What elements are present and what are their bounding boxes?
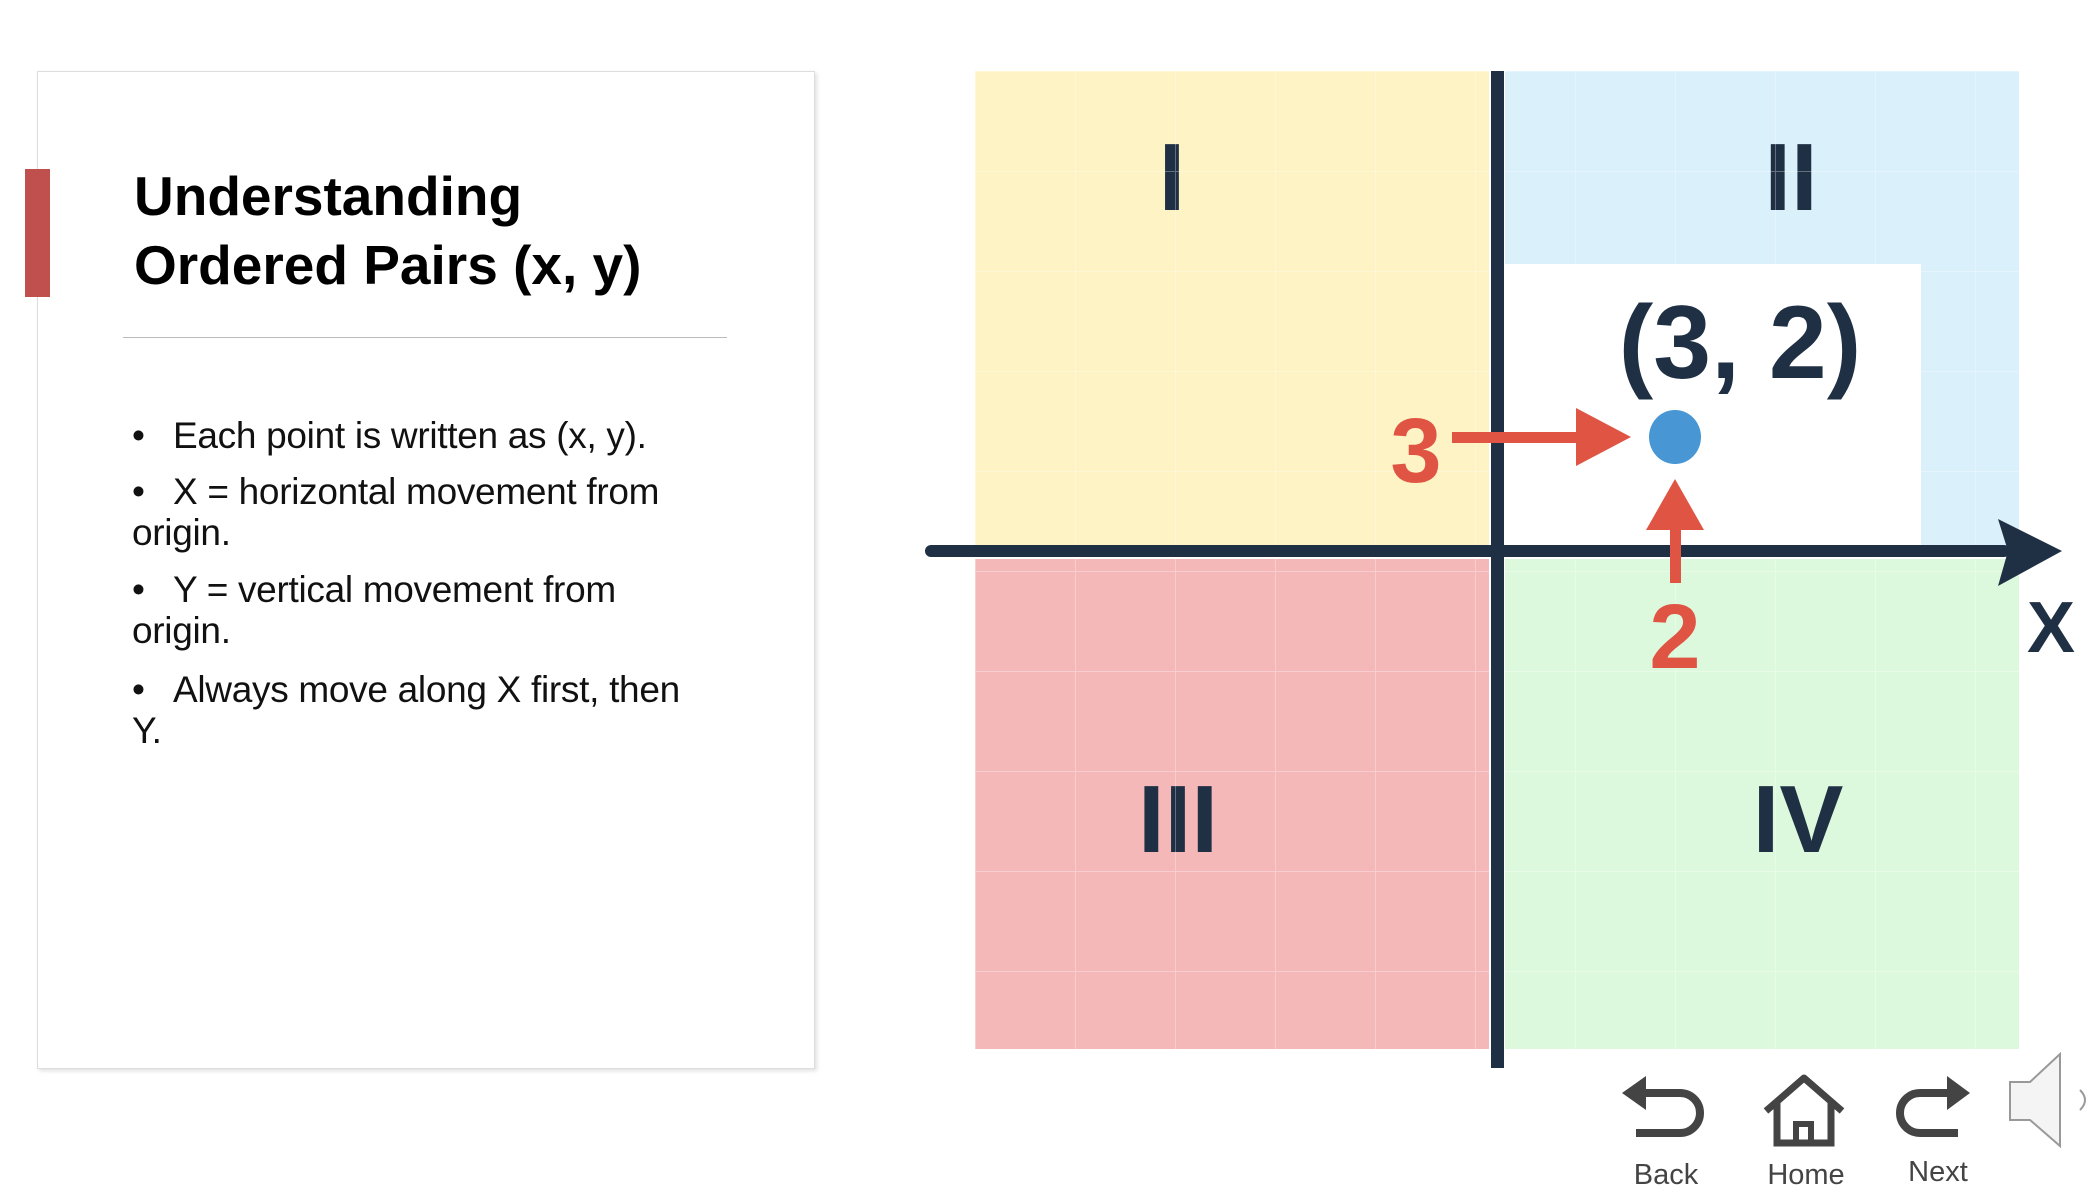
- arrow: y = 2: [1646, 479, 1704, 688]
- bullet list: origin.: [132, 610, 231, 651]
- nav: home: Home: [1767, 1159, 1845, 1191]
- bullet list: X = horizontal movement from: [173, 471, 659, 512]
- icon: speaker: [2010, 1054, 2085, 1146]
- nav: home: [1766, 1078, 1845, 1191]
- bullet list: origin.: [132, 512, 231, 553]
- bullet list: [132, 415, 680, 751]
- point: [1649, 410, 1701, 464]
- bullet list: •: [132, 669, 145, 710]
- title: Ordered Pairs (x, y): [134, 234, 641, 296]
- label: (3, 2): (3, 2): [1619, 285, 1861, 401]
- nav: back: Back: [1634, 1159, 1699, 1191]
- red accent bar: [25, 169, 50, 297]
- arrow: x = 3: 3: [1390, 400, 1442, 502]
- quadrant III: [975, 559, 1489, 1049]
- quadrant III: III: [1138, 766, 1218, 873]
- nav: next: Next: [1908, 1156, 1968, 1188]
- axes: X: [2027, 588, 2075, 668]
- bullet list: •: [132, 471, 145, 512]
- bullet list: Each point is written as (x, y).: [173, 415, 647, 456]
- bullet list: Always move along X first, then: [173, 669, 680, 710]
- arrow: y = 2: 2: [1649, 586, 1701, 688]
- title: Understanding: [134, 165, 522, 227]
- quadrant I: [975, 71, 1489, 546]
- axes: [925, 71, 2075, 1068]
- panel: text card: [37, 71, 815, 1069]
- quadrant II: [1505, 71, 2019, 546]
- quadrant I: I: [1159, 124, 1185, 231]
- bullet list: Y.: [132, 710, 162, 751]
- arrow: x = 3: [1390, 400, 1631, 502]
- nav: next: [1900, 1076, 1970, 1188]
- bullet list: •: [132, 569, 145, 610]
- quadrant IV: [1505, 559, 2019, 1049]
- bullet list: •: [132, 415, 145, 456]
- title: [134, 165, 641, 296]
- nav: back: [1622, 1076, 1700, 1191]
- bullet list: Y = vertical movement from: [173, 569, 616, 610]
- quadrant IV: IV: [1753, 766, 1843, 873]
- quadrant II: II: [1764, 124, 1818, 231]
